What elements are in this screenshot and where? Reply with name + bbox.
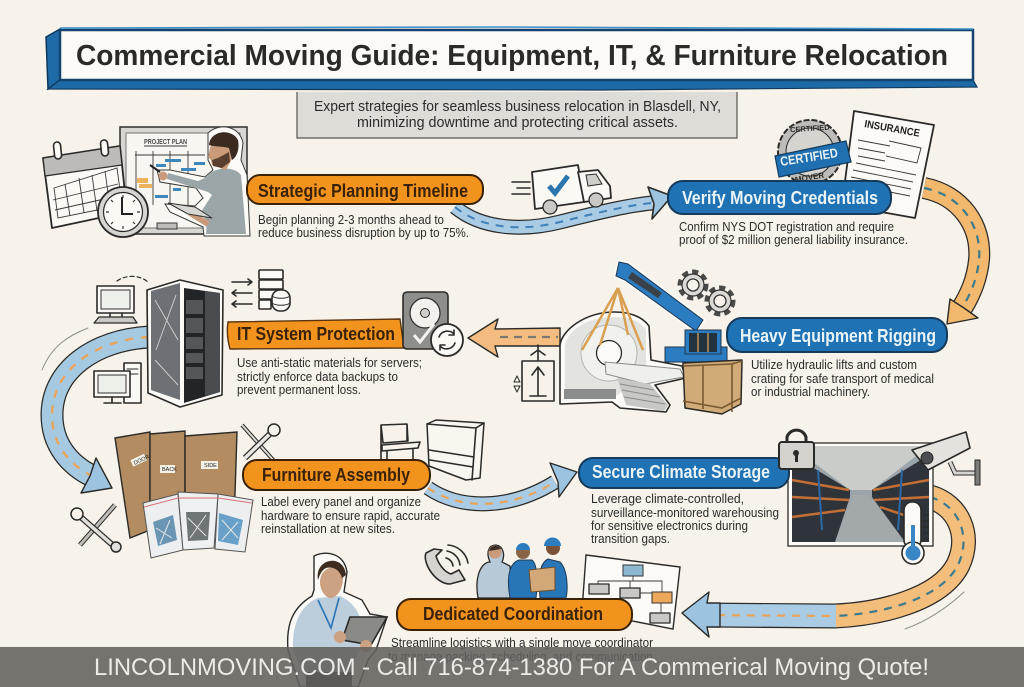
icon: hard drive with sync	[403, 292, 463, 356]
heading: strategic planning timeline	[247, 175, 483, 204]
panel: dedicated coordination	[288, 538, 680, 687]
arrow: rigging to IT	[468, 319, 560, 357]
icon: phone	[425, 545, 468, 584]
icon: calendar	[43, 140, 127, 228]
arrow: IT to furniture	[42, 328, 149, 493]
footer call-to-action bar: LINCOLNMOVING.COM - Call 716-874-1380 For A Commerical Moving Quote!	[94, 654, 929, 681]
panel: verify credentials	[512, 111, 934, 247]
icon: tools bottom	[71, 505, 121, 552]
title text: Commercial Moving Guide: Equipment, IT, & Furniture Relocation	[76, 40, 948, 72]
heading: IT system protection: IT System Protection	[237, 324, 395, 344]
heading: secure climate storage	[579, 458, 789, 488]
icon: lift	[514, 345, 554, 401]
badge: certified mover	[775, 120, 851, 185]
description: crating for safe transport of medical	[751, 372, 934, 386]
icon: delivery truck with check	[512, 165, 611, 214]
heading: verify moving credentials	[668, 181, 891, 214]
description: reinstallation at new sites.	[261, 522, 395, 536]
panel: IT system protection	[94, 270, 463, 407]
whiteboard: project plan: PROJECT PLAN	[144, 139, 187, 146]
description: reduce business disruption by up to 75%.	[258, 226, 469, 240]
wooden crate	[683, 360, 742, 414]
coordinator person	[288, 553, 387, 687]
icon: desktop bottom	[94, 363, 141, 403]
panel: secure climate storage	[579, 430, 980, 564]
icon: monitor top	[94, 276, 149, 323]
heading: furniture assembly: Furniture Assembly	[262, 465, 410, 485]
arrow: furniture to storage	[428, 463, 577, 504]
description: surveillance-monitored warehousing	[591, 506, 779, 520]
heading: heavy equipment rigging: Heavy Equipment Rigging	[740, 326, 936, 346]
badge: certified mover: CERTIFIED	[779, 145, 839, 169]
description: Utilize hydraulic lifts and custom	[751, 358, 917, 372]
badge: certified mover: CERTIFIED	[790, 123, 830, 134]
description: Use anti-static materials for servers;	[237, 356, 422, 370]
panel: strategic planning	[43, 127, 483, 240]
icon: thermometer	[902, 502, 929, 564]
description: proof of $2 million general liability insurance.	[679, 233, 908, 247]
description	[679, 220, 908, 247]
arrow: planning to credentials	[455, 187, 672, 227]
description: Streamline logistics with a single move coordinator	[391, 636, 653, 650]
MRI machine	[560, 288, 686, 412]
subtitle box: minimizing downtime and protecting critical assets.	[357, 114, 678, 131]
panel: furniture assembly	[71, 420, 484, 558]
heading: dedicated coordination	[397, 599, 632, 630]
title banner	[46, 27, 977, 90]
description: Leverage climate-controlled,	[591, 492, 744, 506]
icon: clock	[98, 187, 148, 237]
panel: heavy equipment rigging	[514, 262, 947, 414]
description: transition gaps.	[591, 532, 670, 546]
heading: verify moving credentials: Verify Moving Credentials	[682, 188, 878, 208]
whiteboard: project plan	[120, 127, 247, 234]
icon: data transfer	[232, 270, 290, 311]
description	[258, 213, 469, 240]
server rack wrapped in plastic	[147, 280, 223, 407]
description	[261, 495, 440, 536]
hardware bags	[143, 492, 253, 558]
description	[237, 356, 422, 397]
crane	[616, 262, 727, 362]
heading: heavy equipment rigging	[727, 318, 947, 352]
description: Begin planning 2-3 months ahead to	[258, 213, 444, 227]
subtitle box	[297, 92, 737, 138]
icon: cabinet	[427, 420, 484, 480]
footer call-to-action bar	[0, 647, 1024, 687]
description: or industrial machinery.	[751, 385, 870, 399]
heading: furniture assembly	[243, 460, 430, 490]
flowchart sheet	[582, 555, 680, 629]
heading: strategic planning timeline: Strategic Planning Timeline	[258, 181, 468, 201]
icon: gears	[680, 272, 733, 314]
description	[388, 636, 656, 664]
description	[751, 358, 934, 399]
description: for sensitive electronics during	[591, 519, 748, 533]
warehouse photo	[788, 443, 933, 546]
icon: padlock	[779, 430, 814, 469]
icon: chair	[381, 424, 420, 464]
rigging straps	[582, 288, 643, 350]
furniture panels: SIDE	[204, 463, 217, 469]
heading: IT system protection	[227, 319, 404, 349]
furniture panels	[115, 431, 237, 538]
badge: certified mover: MOVER	[794, 171, 825, 185]
document: insurance: INSURANCE	[863, 118, 921, 140]
heading: dedicated coordination: Dedicated Coordination	[423, 604, 603, 624]
description: Label every panel and organize	[261, 495, 421, 509]
icon: tools top	[242, 424, 280, 462]
arrow: credentials to rigging	[924, 188, 979, 324]
icon: security camera	[912, 432, 980, 485]
document: insurance	[842, 111, 934, 218]
description: hardware to ensure rapid, accurate	[261, 509, 440, 523]
description: prevent permanent loss.	[237, 383, 361, 397]
man pointing at board	[150, 127, 250, 236]
description: strictly enforce data backups to	[237, 370, 398, 384]
description: to manage packing, scheduling, and communication.	[388, 650, 656, 664]
furniture panels: BACK	[162, 467, 177, 473]
subtitle box: Expert strategies for seamless business relocation in Blasdell, NY,	[314, 98, 721, 115]
people with box	[477, 538, 567, 598]
description: Confirm NYS DOT registration and require	[679, 220, 894, 234]
description	[591, 492, 779, 546]
furniture panels: DOOR	[133, 454, 151, 467]
heading: secure climate storage: Secure Climate Storage	[592, 462, 770, 482]
arrow: storage to coordination	[682, 497, 964, 637]
